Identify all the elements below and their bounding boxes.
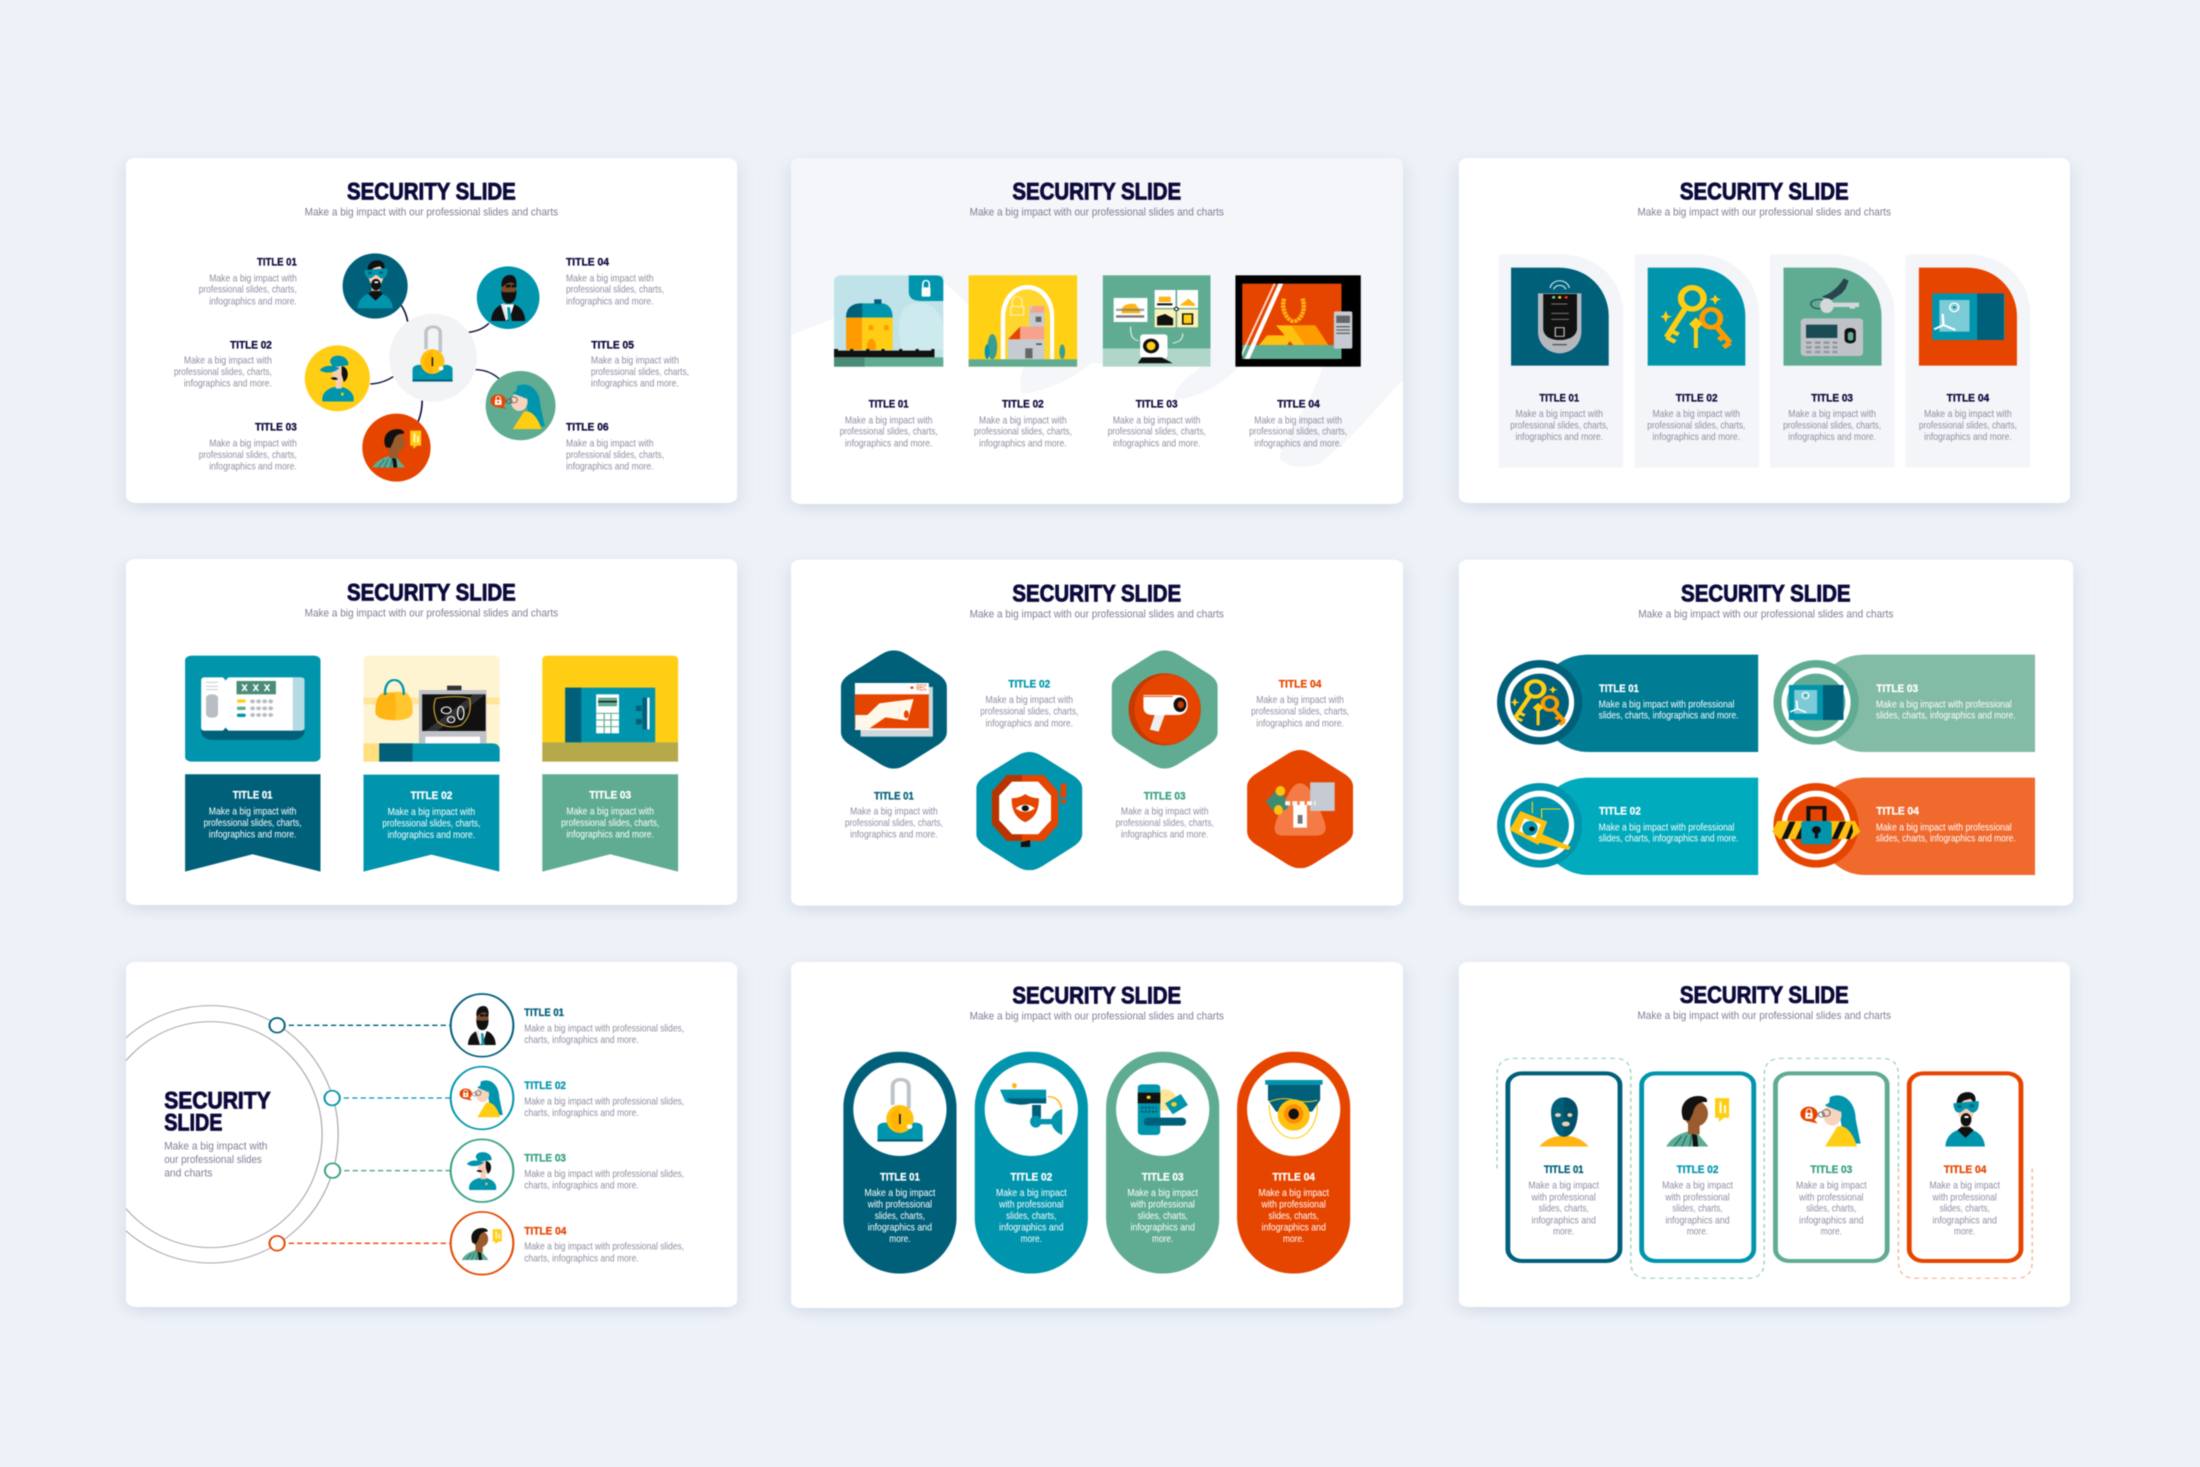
- pill: title 01: TITLE 01: [880, 1171, 920, 1183]
- text: title 03: TITLE 03: [524, 1152, 566, 1164]
- text: title 02: infographics and more.: [184, 379, 272, 389]
- tab: title 04: Make a big impact with professional: [1876, 822, 2012, 833]
- pill: title 03: slides, charts,: [1138, 1211, 1188, 1222]
- heading: SECURITY SLIDE: [1681, 580, 1851, 607]
- text: title 06: Make a big impact with: [566, 438, 654, 449]
- hexagon: chained valuables: [1247, 750, 1353, 868]
- text: title 02: infographics and more.: [979, 438, 1067, 449]
- picture: house under dome: [969, 275, 1077, 367]
- text: title 04: TITLE 04: [566, 256, 609, 268]
- card: title 02: more.: [1687, 1227, 1708, 1237]
- icon: masked man: [343, 253, 408, 319]
- text: title 02: [980, 678, 1078, 729]
- text: title 03: TITLE 03: [255, 421, 297, 433]
- text: title 04: TITLE 04: [524, 1224, 566, 1237]
- text: title 06: professional slides, charts,: [566, 450, 664, 461]
- pill: title 03: infographics and: [1131, 1223, 1195, 1233]
- tab: title 01: slides, charts, infographics and more.: [1599, 711, 1738, 721]
- text: title 04: Make a big impact with professional slides,: [524, 1242, 684, 1252]
- text: title 02: professional slides, charts,: [974, 427, 1072, 437]
- text: title 05: [591, 338, 689, 389]
- pill: title 01: [843, 1052, 957, 1274]
- card: title 01: slides, charts,: [1539, 1204, 1589, 1214]
- pill: title 02: with professional: [998, 1200, 1063, 1210]
- heading: SECURITY SLIDE: [1680, 178, 1849, 205]
- text: title 01: infographics and more.: [1515, 432, 1603, 443]
- tab: title 03: slides, charts, infographics and more.: [1876, 711, 2016, 721]
- text: title 04: Make a big impact with: [1924, 409, 2012, 420]
- text: title 04: TITLE 04: [1279, 678, 1321, 690]
- hexagon: recording camera: [841, 650, 947, 769]
- text: title 03: infographics and more.: [1113, 438, 1200, 449]
- pill: title 02: TITLE 02: [1010, 1171, 1052, 1183]
- heading: [305, 178, 558, 218]
- card: title 01: with professional: [1531, 1192, 1596, 1203]
- ribbon: title 01: infographics and more.: [209, 830, 296, 840]
- text: title 01: charts, infographics and more.: [524, 1035, 639, 1046]
- tab: title 02: slides, charts, infographics and more.: [1599, 834, 1738, 844]
- card: keys: [1634, 254, 1759, 468]
- text: title 01: infographics and more.: [209, 296, 297, 307]
- text: title 06: TITLE 06: [566, 421, 609, 433]
- text: title 04: TITLE 04: [1277, 398, 1320, 410]
- tab: title 03: TITLE 03: [1876, 682, 1918, 695]
- pill: title 04: Make a big impact: [1258, 1188, 1329, 1199]
- text: title 01: TITLE 01: [524, 1006, 564, 1019]
- card: title 04: infographics and: [1933, 1215, 1997, 1226]
- text: title 05: infographics and more.: [591, 379, 679, 389]
- text: title 02: TITLE 02: [1002, 398, 1044, 410]
- heading: Make a big impact with our professional slides and charts: [305, 607, 558, 619]
- pill: title 04: more.: [1283, 1234, 1304, 1245]
- tab: title 03: [1773, 655, 2035, 752]
- card: title 02: slides, charts,: [1672, 1204, 1723, 1214]
- text: title 02: professional slides, charts,: [174, 367, 272, 378]
- text: title 01: Make a big impact with: [1515, 409, 1603, 420]
- card: title 02: with professional: [1665, 1192, 1730, 1203]
- card: title 01: [1508, 1073, 1620, 1261]
- pill: title 04: TITLE 04: [1272, 1171, 1315, 1183]
- text: title 01: Make a big impact with: [850, 807, 938, 817]
- icon: man with bubble: [451, 1212, 513, 1275]
- card: title 01: TITLE 01: [1544, 1163, 1584, 1176]
- icon: woman: [451, 1067, 513, 1129]
- dotted connector 03: [325, 1163, 450, 1178]
- tab: title 02: TITLE 02: [1599, 805, 1641, 817]
- card: title 03: TITLE 03: [1810, 1163, 1852, 1176]
- ribbon: title 01: Make a big impact with: [209, 807, 296, 817]
- text: title 02: Make a big impact with professional slides,: [524, 1096, 684, 1107]
- text: title 01: infographics and more.: [845, 438, 932, 449]
- pill: title 03: [1106, 1052, 1219, 1274]
- card: title 03: infographics and: [1799, 1215, 1863, 1226]
- text: title 02: [1647, 392, 1745, 443]
- text: title 03: infographics and more.: [1788, 432, 1876, 443]
- pill: title 03: with professional: [1130, 1200, 1195, 1210]
- ribbon: title 03: [542, 774, 678, 872]
- text: title 03: TITLE 03: [1136, 398, 1178, 410]
- text: title 03: professional slides, charts,: [1783, 420, 1881, 431]
- text: title 03: Make a big impact with: [1113, 415, 1201, 426]
- hexagon: shield alarm: [976, 752, 1082, 870]
- ribbon: title 02: infographics and more.: [388, 830, 475, 841]
- text: title 03: Make a big impact with: [1121, 807, 1209, 817]
- text: title 03: Make a big impact with: [1788, 409, 1876, 420]
- text: title 03: Make a big impact with professional slides,: [524, 1169, 684, 1180]
- text: title 02: Make a big impact with: [1653, 409, 1740, 420]
- text: title 04: professional slides, charts,: [1919, 420, 2017, 431]
- text: title 03: [199, 421, 297, 472]
- panel 9: four outlined people cards: [1459, 962, 2070, 1307]
- card: title 02: [1642, 1073, 1754, 1261]
- text: title 05: TITLE 05: [591, 338, 634, 351]
- heading: [1637, 981, 1891, 1022]
- icon: woman: [486, 371, 556, 440]
- heading: [1637, 178, 1891, 218]
- text: title 04: charts, infographics and more.: [524, 1253, 639, 1264]
- text: title 01: [840, 398, 938, 449]
- panel 5: four hexagons: [791, 560, 1403, 906]
- pill: title 04: slides, charts,: [1269, 1211, 1319, 1222]
- card: fingerprint reader: [1499, 254, 1623, 468]
- text: title 03: [524, 1152, 684, 1191]
- text: title 03: TITLE 03: [1811, 392, 1853, 404]
- tab: title 01: [1497, 655, 1758, 752]
- text: title 03: professional slides, charts,: [199, 450, 297, 461]
- text: title 06: [566, 421, 664, 472]
- text: title 04: infographics and more.: [1256, 718, 1344, 729]
- icon: police officer: [451, 1139, 513, 1202]
- card: title 03: more.: [1821, 1227, 1842, 1237]
- ribbon: title 03: infographics and more.: [566, 830, 654, 840]
- text: title 04: professional slides, charts,: [1251, 707, 1349, 717]
- ribbon: title 02: [363, 775, 499, 872]
- panel 2: four picture cards: [791, 158, 1403, 504]
- text: title 01: [1510, 392, 1608, 443]
- dotted connector 02: [325, 1091, 450, 1105]
- picture: bag scanner: [363, 656, 500, 762]
- heading: SECURITY SLIDE: [1012, 982, 1181, 1009]
- pill: title 01: infographics and: [868, 1223, 932, 1233]
- card: title 02: TITLE 02: [1677, 1163, 1718, 1176]
- picture: house with lock: [834, 275, 943, 367]
- tab: title 04: slides, charts, infographics and more.: [1876, 834, 2016, 844]
- card: title 04: Make a big impact: [1929, 1181, 2000, 1191]
- heading: SLIDE: [164, 1109, 222, 1136]
- heading: Make a big impact with our professional slides and charts: [1637, 1009, 1891, 1022]
- text: title 03: infographics and more.: [209, 461, 297, 472]
- text: title 04: infographics and more.: [1924, 432, 2012, 443]
- heading: SECURITY: [164, 1087, 271, 1114]
- pill: title 04: with professional: [1261, 1200, 1326, 1210]
- ribbon: title 02: Make a big impact with: [388, 807, 475, 818]
- text: title 04: infographics and more.: [566, 296, 654, 307]
- pill: title 01: with professional: [867, 1200, 932, 1210]
- text: title 02: professional slides, charts,: [980, 707, 1078, 717]
- pill: title 02: Make a big impact: [996, 1188, 1067, 1199]
- card: title 01: more.: [1553, 1227, 1574, 1237]
- ribbon: title 03: professional slides, charts,: [561, 818, 659, 829]
- card: title 04: slides, charts,: [1940, 1204, 1990, 1214]
- tab: title 01: TITLE 01: [1599, 682, 1639, 695]
- pill: title 02: more.: [1021, 1234, 1042, 1245]
- text: title 04: professional slides, charts,: [566, 285, 664, 295]
- pill: title 01: more.: [889, 1234, 911, 1245]
- text: title 03: professional slides, charts,: [1116, 818, 1214, 829]
- heading: Make a big impact with: [164, 1140, 267, 1152]
- text: title 03: [1783, 392, 1881, 443]
- heading: [970, 580, 1224, 620]
- dashed outline: [1497, 1058, 2032, 1278]
- card: key and keypad: [1770, 254, 1894, 468]
- picture: camera monitoring wall: [1103, 275, 1211, 367]
- text: title 01: [199, 256, 297, 307]
- text: title 03: charts, infographics and more.: [524, 1180, 639, 1191]
- heading: [305, 579, 558, 619]
- pill: title 03: TITLE 03: [1142, 1171, 1184, 1183]
- pill: title 01: slides, charts,: [875, 1211, 925, 1222]
- ribbon: title 03: TITLE 03: [589, 789, 631, 801]
- text: title 06: infographics and more.: [566, 461, 654, 472]
- card: title 03: slides, charts,: [1806, 1204, 1856, 1214]
- panel 6: four tabs with circular icons: [1459, 560, 2073, 906]
- picture: wall safe: [542, 656, 678, 762]
- text: title 02: [974, 398, 1072, 449]
- pill: title 03: more.: [1152, 1234, 1173, 1245]
- dotted connector 01: [269, 1018, 450, 1033]
- text: title 04: [1251, 678, 1349, 729]
- ribbon: title 01: [185, 774, 320, 872]
- panel 8: four pills: [791, 962, 1403, 1308]
- text: title 01: professional slides, charts,: [840, 427, 938, 437]
- icon: bearded man: [477, 266, 539, 329]
- picture: gold behind glass: [1235, 275, 1361, 367]
- pill: title 04: infographics and: [1262, 1223, 1326, 1233]
- picture: alarm keypad: [185, 656, 320, 762]
- card: title 03: Make a big impact: [1796, 1181, 1867, 1191]
- text: title 03: TITLE 03: [1144, 789, 1186, 802]
- connector lines: [370, 305, 500, 422]
- panel 3: four access cards: [1459, 158, 2070, 503]
- heading: our professional slides: [164, 1153, 262, 1166]
- text: title 03: infographics and more.: [1121, 830, 1208, 840]
- text: title 04: [1919, 392, 2017, 443]
- concentric circles: [126, 1004, 340, 1264]
- text: title 02: TITLE 02: [1008, 678, 1050, 690]
- text: title 04: infographics and more.: [1254, 438, 1342, 449]
- tab: title 03: Make a big impact with professional: [1876, 699, 2012, 710]
- text: title 01: professional slides, charts,: [845, 818, 943, 829]
- heading: SECURITY SLIDE: [1012, 178, 1181, 205]
- heading: Make a big impact with our professional slides and charts: [1637, 206, 1891, 218]
- text: title 03: professional slides, charts,: [1108, 427, 1206, 437]
- ribbon: title 01: TITLE 01: [233, 789, 272, 801]
- ribbon: title 02: professional slides, charts,: [382, 818, 480, 829]
- text: title 02: Make a big impact with: [979, 415, 1067, 426]
- heading: SECURITY SLIDE: [1680, 981, 1849, 1008]
- text: title 01: Make a big impact with professional slides,: [524, 1024, 684, 1034]
- panel 7: concentric circle with dotted lines: [83, 962, 737, 1307]
- card: title 01: infographics and: [1532, 1215, 1596, 1226]
- card: title 04: more.: [1954, 1227, 1975, 1237]
- text: title 02: Make a big impact with: [985, 695, 1073, 706]
- card: title 04: with professional: [1932, 1192, 1997, 1203]
- panel 4: three pictures with ribbons: [126, 559, 737, 905]
- text: title 01: TITLE 01: [257, 256, 297, 268]
- icon: man with bubble: [362, 414, 431, 482]
- text: title 04: Make a big impact with: [1256, 695, 1344, 706]
- heading: [1638, 580, 1893, 620]
- text: title 02: infographics and more.: [1653, 432, 1740, 443]
- heading: [164, 1087, 271, 1179]
- text: title 05: Make a big impact with: [591, 356, 679, 366]
- text: title 02: Make a big impact with: [184, 356, 272, 366]
- card: title 03: with professional: [1798, 1192, 1863, 1203]
- ribbon: title 03: Make a big impact with: [566, 807, 654, 817]
- text: title 02: TITLE 02: [1676, 392, 1718, 404]
- hexagon: recording camera: REC: [916, 683, 927, 692]
- heading: Make a big impact with our professional slides and charts: [970, 206, 1224, 218]
- text: title 01: professional slides, charts,: [1510, 420, 1608, 431]
- text: title 03: [1116, 789, 1214, 840]
- text: title 02: charts, infographics and more.: [524, 1108, 639, 1119]
- heading: Make a big impact with our professional slides and charts: [970, 1010, 1224, 1022]
- text: title 01: Make a big impact with: [209, 273, 297, 284]
- card: title 02: Make a big impact: [1662, 1181, 1733, 1191]
- text: title 05: professional slides, charts,: [591, 367, 689, 378]
- text: title 02: infographics and more.: [985, 718, 1073, 729]
- heading: and charts: [164, 1166, 212, 1179]
- text: title 04: [1249, 398, 1347, 449]
- heading: SECURITY SLIDE: [1012, 580, 1181, 607]
- card: safe: [1906, 254, 2030, 468]
- text: title 03: Make a big impact with: [209, 438, 297, 449]
- card: title 04: TITLE 04: [1944, 1163, 1986, 1176]
- text: title 02: professional slides, charts,: [1647, 420, 1745, 431]
- text: title 02: TITLE 02: [524, 1079, 566, 1092]
- text: title 01: TITLE 01: [874, 789, 914, 802]
- heading: Make a big impact with our professional slides and charts: [1638, 608, 1893, 620]
- hexagon: wall camera: [1112, 650, 1218, 769]
- card: title 01: Make a big impact: [1528, 1181, 1599, 1191]
- icon: bearded man: [451, 994, 513, 1057]
- pill: title 03: Make a big impact: [1127, 1188, 1198, 1199]
- heading: SECURITY SLIDE: [347, 579, 516, 606]
- text: title 01: professional slides, charts,: [199, 285, 297, 295]
- card: title 02: infographics and: [1665, 1215, 1730, 1226]
- text: title 04: TITLE 04: [1947, 392, 1989, 404]
- text: title 01: TITLE 01: [1539, 392, 1579, 404]
- text: title 02: TITLE 02: [230, 338, 272, 351]
- text: title 04: professional slides, charts,: [1249, 427, 1347, 437]
- card: title 03: [1775, 1073, 1887, 1261]
- text: title 01: [845, 789, 943, 840]
- pill: title 01: Make a big impact: [865, 1188, 935, 1199]
- heading: [970, 982, 1224, 1022]
- pill: title 02: infographics and: [999, 1223, 1063, 1233]
- card: title 04: [1909, 1073, 2021, 1261]
- icon: police officer: [305, 345, 370, 411]
- heading: [970, 178, 1224, 218]
- text: title 02: [174, 338, 272, 389]
- ribbon: title 02: TITLE 02: [411, 789, 452, 802]
- heading: Make a big impact with our professional slides and charts: [970, 608, 1224, 620]
- text: title 04: [566, 256, 664, 307]
- text: title 04: Make a big impact with: [1254, 415, 1342, 426]
- tab: title 04: TITLE 04: [1876, 805, 1919, 817]
- pill: title 02: slides, charts,: [1006, 1211, 1056, 1222]
- centre padlock icon: [389, 314, 477, 402]
- text: title 02: [524, 1079, 684, 1119]
- dotted connector 04: [269, 1236, 450, 1251]
- text: title 01: [524, 1006, 684, 1046]
- panel 1: six people around padlock: [126, 158, 737, 503]
- tab: title 02: Make a big impact with professional: [1599, 822, 1734, 833]
- text: title 01: infographics and more.: [850, 830, 938, 840]
- text: title 01: TITLE 01: [869, 398, 909, 410]
- text: title 04: Make a big impact with: [566, 273, 654, 284]
- tab: title 04: [1772, 778, 2035, 875]
- pill: title 02: [975, 1052, 1088, 1274]
- pill: title 04: [1237, 1052, 1350, 1274]
- text: title 04: [524, 1224, 684, 1264]
- text: title 01: Make a big impact with: [845, 415, 933, 426]
- ribbon: title 01: professional slides, charts,: [204, 818, 302, 829]
- tab: title 02: [1497, 778, 1758, 875]
- tab: title 01: Make a big impact with professional: [1599, 699, 1734, 710]
- heading: SECURITY SLIDE: [347, 178, 516, 205]
- heading: Make a big impact with our professional slides and charts: [305, 206, 558, 218]
- text: title 03: [1108, 398, 1206, 449]
